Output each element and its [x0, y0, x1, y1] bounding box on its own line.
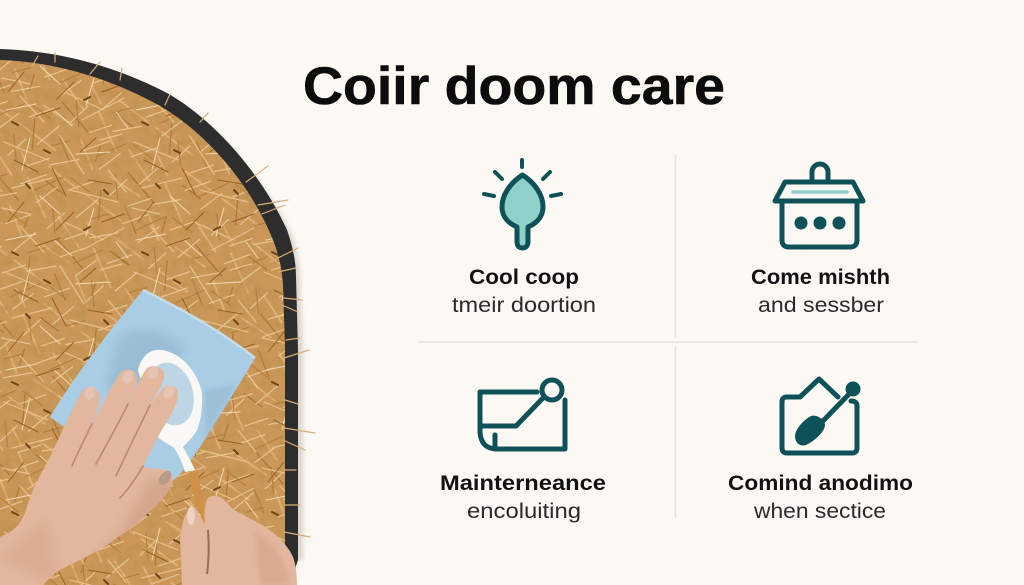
hand shading — [11, 479, 172, 576]
coir fibre surface — [0, 60, 285, 585]
description: tmeir doortion — [452, 294, 596, 317]
mat binding border — [0, 40, 310, 585]
heading: Cool coop — [469, 266, 579, 289]
mat shadow — [0, 52, 303, 585]
right hand on the handle — [180, 496, 297, 585]
blue cloth — [50, 290, 255, 493]
heading: Comind anodimo — [728, 472, 913, 495]
description: when sectice — [753, 500, 886, 523]
icon: light bulb — [484, 160, 561, 248]
dividers — [418, 155, 918, 518]
description: encoluiting — [467, 500, 581, 523]
heading: Mainterneance — [440, 472, 606, 495]
fingernails — [83, 364, 177, 487]
item: comind anodimo — [728, 379, 913, 523]
item: cool coop — [452, 160, 596, 317]
photo: coir doormat with cleaning hands — [0, 40, 315, 585]
title: Coiir doom care — [303, 57, 725, 116]
item: come mishth — [751, 164, 890, 317]
finger creases — [72, 404, 150, 498]
icon: lidded box — [775, 164, 863, 247]
description: and sessber — [758, 294, 884, 317]
white brush with gold handle — [138, 350, 208, 522]
heading: Come mishth — [751, 266, 890, 289]
left hand on the brush — [0, 364, 178, 585]
icon: document with pin — [480, 380, 565, 449]
stray fibres over the border — [32, 53, 315, 537]
icon: house with shovel — [782, 379, 860, 453]
item: maintenance — [440, 380, 606, 523]
